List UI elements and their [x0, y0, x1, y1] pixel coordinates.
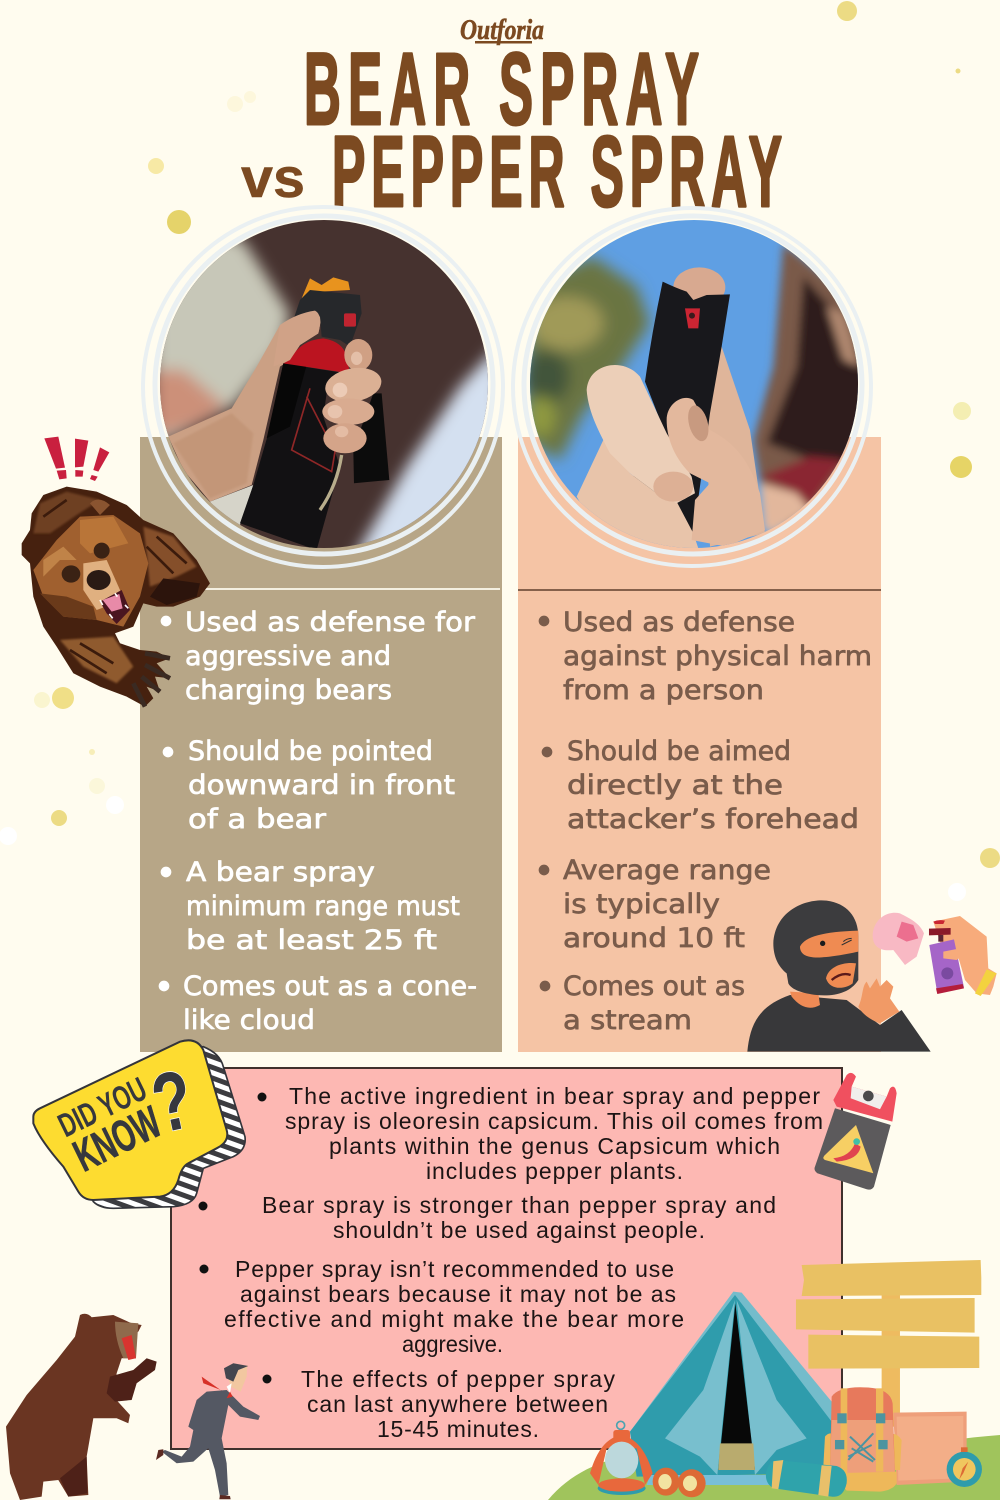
text: did you know facts	[198, 1083, 823, 1442]
illustration: angry bear	[22, 487, 210, 707]
text: pepper spray facts	[539, 607, 872, 1036]
text: bear spray facts: Comes out as a cone-	[183, 971, 477, 1002]
text: pepper spray facts: is typically	[563, 889, 720, 920]
text: pepper spray facts: a stream	[563, 1005, 692, 1036]
title: PEPPER SPRAY	[332, 115, 782, 228]
title: BEAR SPRAY	[304, 33, 699, 147]
text: pepper spray facts: Used as defense	[563, 607, 795, 638]
text: bear spray facts: be at least 25 ft	[186, 925, 437, 956]
text: bear spray facts: downward in front	[188, 770, 455, 801]
panel: did you know	[171, 1068, 842, 1449]
text: did you know facts: can last anywhere between	[307, 1391, 608, 1417]
badge: did you know: DID YOU	[53, 1071, 153, 1145]
panel: pepper spray	[518, 437, 881, 1052]
text: bear spray facts: charging bears	[185, 675, 392, 706]
illustration: sleeping bag	[766, 1460, 847, 1497]
illustration: map	[893, 1412, 967, 1485]
illustration: masked attacker	[747, 900, 931, 1052]
badge: did you know: KNOW	[66, 1096, 169, 1181]
text: did you know facts: plants within the genus Capsicum which	[329, 1133, 780, 1159]
panel: bear spray	[140, 437, 502, 1052]
icon: alert marks	[44, 437, 109, 481]
illustration: standing brown bear	[6, 1314, 157, 1500]
text: did you know facts: includes pepper plants.	[426, 1158, 683, 1184]
badge: did you know: ?	[144, 1051, 201, 1151]
text: pepper spray facts: Comes out as	[563, 971, 745, 1002]
text: pepper spray facts: from a person	[563, 675, 764, 706]
text: did you know facts: Bear spray is stronger than pepper spray and	[262, 1192, 776, 1218]
text: bear spray facts: aggressive and	[185, 641, 391, 672]
ground: grass	[548, 1435, 1000, 1500]
text: did you know facts: shouldn’t be used against people.	[333, 1217, 705, 1243]
illustration: compass	[947, 1447, 982, 1487]
text: did you know facts: Pepper spray isn’t recommended to use	[235, 1256, 674, 1282]
icon: pepper spray canister	[815, 1073, 897, 1190]
text: did you know facts: 15-45 minutes.	[377, 1416, 539, 1442]
text: bear spray facts	[159, 607, 477, 1036]
text: bear spray facts: minimum range must	[186, 891, 460, 922]
text: pepper spray facts: Should be aimed	[567, 736, 791, 767]
text: pepper spray facts: attacker’s forehead	[567, 804, 859, 835]
text: pepper spray facts: around 10 ft	[563, 923, 745, 954]
illustration: running man	[156, 1363, 260, 1499]
badge: did you know	[33, 1040, 245, 1208]
text: pepper spray facts: directly at the	[567, 770, 783, 801]
text: bear spray facts: of a bear	[188, 804, 327, 835]
title	[241, 33, 782, 228]
text: did you know facts: spray is oleoresin capsicum. This oil comes from	[285, 1108, 823, 1134]
title: vs	[241, 146, 305, 209]
text: did you know facts: aggresive.	[402, 1331, 503, 1357]
text: did you know facts: The active ingredient in bear spray and pepper	[289, 1083, 820, 1109]
text: bear spray facts: Used as defense for	[185, 607, 476, 638]
illustration: backpack	[823, 1387, 902, 1492]
text: bear spray facts: Should be pointed	[188, 736, 433, 767]
text: did you know facts: effective and might make the bear more	[224, 1306, 684, 1332]
text: pepper spray facts: Average range	[563, 855, 771, 886]
illustration: lantern	[590, 1421, 653, 1495]
text: did you know facts: The effects of pepper spray	[301, 1366, 616, 1392]
text: bear spray facts: A bear spray	[186, 857, 375, 888]
illustration: binoculars	[653, 1468, 706, 1497]
illustration: wooden sign	[796, 1260, 981, 1427]
logo: Outforia	[460, 15, 544, 46]
text: pepper spray facts: against physical harm	[563, 641, 872, 672]
text: did you know facts: against bears because it may not be as	[240, 1281, 676, 1307]
photo: hand holding pepper spray	[513, 208, 877, 566]
text: bear spray facts: like cloud	[183, 1005, 315, 1036]
illustration: tent	[630, 1292, 832, 1485]
illustration: pepper spray cloud and hand	[873, 913, 997, 996]
photo: hand holding bear spray	[143, 207, 503, 567]
